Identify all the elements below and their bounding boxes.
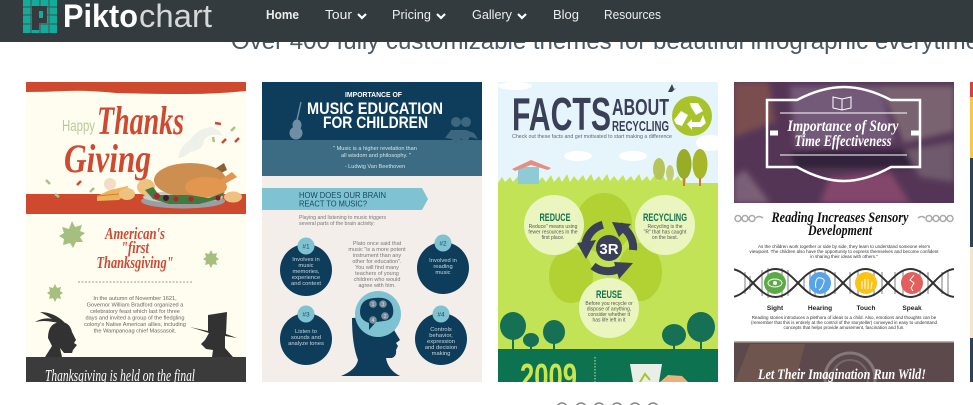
subheading: first Thanksgiving: American's <box>104 224 165 243</box>
paragraph: colony's Native American allies, including <box>84 322 186 328</box>
silhouette: pilgrim <box>190 312 237 357</box>
circle: reduce: Reduce" means using <box>529 224 578 230</box>
steam <box>178 127 223 158</box>
pie slice <box>97 178 128 201</box>
circle: reuse <box>579 278 639 338</box>
heading: Happy Thanks Giving <box>62 106 184 180</box>
quote <box>333 146 417 170</box>
circle #1: Involves in <box>292 257 320 263</box>
circle #1: memories, <box>292 269 320 275</box>
circle #2: #2 <box>439 240 447 248</box>
confetti <box>46 123 239 197</box>
circle #4: behavior, <box>429 333 453 339</box>
circle #3: Listen to <box>295 329 317 335</box>
paragraph 1 <box>749 244 939 259</box>
circle #2: music <box>435 270 451 276</box>
circle #1: experience <box>292 275 320 281</box>
circle #3: #3 <box>302 312 310 318</box>
arrow banner: HOW DOES OUR BRAIN <box>299 190 386 200</box>
circle: reuse: dispose of anything, <box>587 306 631 312</box>
turkey on plate <box>119 163 242 208</box>
icon: 3R cycle <box>577 222 633 279</box>
bottom band <box>26 194 246 214</box>
footer script text: Thanksgiving is held on the final <box>45 366 195 385</box>
circle: reduce: fewer resources in the <box>528 230 578 236</box>
icon: head with brain <box>341 291 401 376</box>
title <box>308 92 442 128</box>
circle #1: and context <box>291 281 321 287</box>
paragraph 1: As the children work together or side by side, they learn to understand someone else's <box>758 244 931 249</box>
quote: " Music is a higher revelation than <box>333 146 417 152</box>
sense labels: Touch <box>856 305 876 312</box>
panel: recycling infographic <box>498 82 724 397</box>
pagination dots <box>557 403 658 405</box>
navigation: Home <box>266 8 299 22</box>
year text: 2009 <box>520 356 577 397</box>
title: ABOUT <box>612 94 669 120</box>
paragraph: celebratory feast which last for three <box>90 309 180 315</box>
circle: reduce: REDUCE <box>540 212 570 224</box>
circle #4: expression <box>427 339 455 345</box>
badge frame <box>767 87 920 181</box>
circle #1: #1 <box>302 244 310 250</box>
blob shapes <box>549 193 662 303</box>
heading ornaments <box>735 216 953 222</box>
centre text: other for education". <box>352 259 402 265</box>
centre text: music "is a more potent <box>348 247 406 253</box>
circle: reuse: REUSE <box>596 289 622 301</box>
centre text: Plato once said that <box>353 241 402 247</box>
circle: reduce: first place. <box>542 235 564 241</box>
circle #4 <box>415 306 467 365</box>
navigation: Gallery <box>472 8 513 22</box>
clouds <box>498 82 724 161</box>
quote: all wisdom and philosophy. " <box>341 153 411 159</box>
sense labels <box>767 305 922 312</box>
title <box>514 98 669 131</box>
arrow banner: REACT TO MUSIC? <box>299 198 367 208</box>
title: FACTS <box>512 88 611 140</box>
title: MUSIC EDUCATION <box>307 99 443 118</box>
icon: recycling badge <box>672 96 712 136</box>
logo icon <box>23 0 57 33</box>
bird <box>668 84 676 92</box>
centre text: children who would <box>354 277 400 283</box>
photo banner <box>734 82 954 203</box>
heading: sensory development: Development <box>807 223 873 239</box>
header bar <box>0 0 973 42</box>
subheading: first Thanksgiving <box>96 224 174 272</box>
panel: music education infographic <box>262 82 482 382</box>
subheading: first Thanksgiving: "first <box>121 238 150 257</box>
heading: Happy Thanks Giving: Happy <box>62 118 95 135</box>
centre text: You will find many <box>355 265 399 271</box>
circle #4: #4 <box>437 312 445 318</box>
next card edge strip <box>970 82 973 382</box>
circle: reduce <box>524 195 584 255</box>
trees top <box>653 149 708 186</box>
sense labels: Sight <box>767 305 784 312</box>
circle #2: reading <box>433 264 453 270</box>
leaves <box>47 221 219 302</box>
navigation: Pricing <box>392 8 431 22</box>
sense icons <box>764 272 923 294</box>
paragraph 1: viewpoint. The children also have the opportunity to express themselves and become confident <box>749 249 939 254</box>
paragraph 1: in sharing their ideas with others." <box>810 254 878 259</box>
quote: - Ludwig Van Beethoven <box>345 164 405 170</box>
icon: bin <box>630 364 688 382</box>
badge title: Importance of Story <box>787 118 899 135</box>
navigation: Resources <box>604 8 661 22</box>
dark footer <box>26 357 246 382</box>
centre text: teachers of young <box>355 271 399 277</box>
centre text: agree with him. <box>358 283 396 289</box>
icon: head with brain: 1 <box>372 302 375 308</box>
centre text <box>348 241 406 289</box>
intro text: several parts of the brain activity: <box>299 221 375 227</box>
paragraph <box>84 296 186 334</box>
circle #1 <box>280 238 332 296</box>
circle #3: sounds and <box>291 335 321 341</box>
paragraph 2: Reading stories introduces a plethora of ideas to a child. Also, emotions and thoughts can be <box>752 315 937 320</box>
circle: recycling: on the best. <box>652 235 678 241</box>
intro text: Playing and listening to music triggers <box>299 215 386 221</box>
circle #4: and decision <box>425 345 457 351</box>
bottom photo band <box>734 341 954 403</box>
navigation: Blog <box>553 8 579 22</box>
paragraph: days and invited a group of the fledgling <box>86 316 184 322</box>
centre text: instrument than any <box>353 253 401 259</box>
sense labels: Speak <box>902 305 922 312</box>
navigation <box>266 8 661 22</box>
icon: violin <box>290 102 302 139</box>
paragraph: the Wampanoag chief Massasoit. <box>94 328 177 334</box>
silhouette: native american <box>35 312 77 357</box>
circle: reuse: has life left in it <box>592 318 626 324</box>
circle #3: analyze tones <box>288 341 324 347</box>
top wave banner <box>26 82 246 94</box>
circle: recycling <box>635 195 695 255</box>
paragraph: Governor William Bradford organized a <box>87 302 184 308</box>
circle: recycling: Recycling is the <box>647 224 683 230</box>
subtitle partly hidden behind header: Over 400 fully customizable themes for beautiful infographic everytime <box>231 28 973 55</box>
badge title: Time Effectiveness <box>794 133 892 150</box>
circle #4: making <box>432 351 450 357</box>
paragraph 2: concepts that helps provide amusement, fascination and fun. <box>783 325 905 330</box>
heading: sensory development <box>771 210 909 239</box>
icon: head with brain: 4 <box>372 318 375 324</box>
circle #2 <box>417 234 469 294</box>
grass edge <box>498 174 686 183</box>
heading: Happy Thanks Giving: Thanks <box>97 98 184 143</box>
circle #4: Controls <box>430 327 452 333</box>
paragraph 2 <box>751 315 938 330</box>
tree silhouettes <box>500 312 715 349</box>
panel: Thanksgiving infographic <box>26 82 246 385</box>
intro text <box>299 215 386 227</box>
title: IMPORTANCE OF <box>345 90 402 99</box>
navigation: Tour <box>325 8 352 22</box>
paragraph: In the autumn of November 1621, <box>93 296 177 302</box>
circle: recycling: "R" that has caught <box>644 230 687 236</box>
icon: children <box>445 117 478 140</box>
circle #2: Involved in <box>429 258 457 264</box>
house <box>512 160 551 184</box>
title: FOR CHILDREN <box>323 113 428 132</box>
caption: Check out these facts and get motivated to start making a difference <box>512 134 672 140</box>
arrow banner <box>262 188 428 210</box>
circle #3 <box>280 306 332 365</box>
title: RECYCLING <box>612 118 669 135</box>
badge title <box>787 118 899 150</box>
bottom script text: Let Their Imagination Run Wild! <box>757 367 926 383</box>
heading: sensory development: Reading Increases Sensory <box>771 210 909 226</box>
circle: reuse: Before you recycle or <box>585 301 633 307</box>
DNA helix <box>730 268 956 298</box>
sense labels: Hearing <box>808 305 832 312</box>
circle: reuse: consider whether it <box>588 312 631 318</box>
icon: head with brain: 3 <box>382 302 385 308</box>
paragraph 2: (remember that this is entirely at the control of the storyteller) conveyed in easy to understand <box>751 320 938 325</box>
dark green section <box>498 349 718 382</box>
heading: Happy Thanks Giving: Giving <box>64 136 151 181</box>
icon: head with brain: 2 <box>384 314 387 320</box>
circle #1: music <box>298 263 314 269</box>
subheading: first Thanksgiving: Thanksgiving" <box>96 253 174 272</box>
panel: story time infographic <box>730 82 956 403</box>
circle: recycling: RECYCLING <box>643 212 687 224</box>
icon: 3R cycle: 3R <box>599 241 619 258</box>
